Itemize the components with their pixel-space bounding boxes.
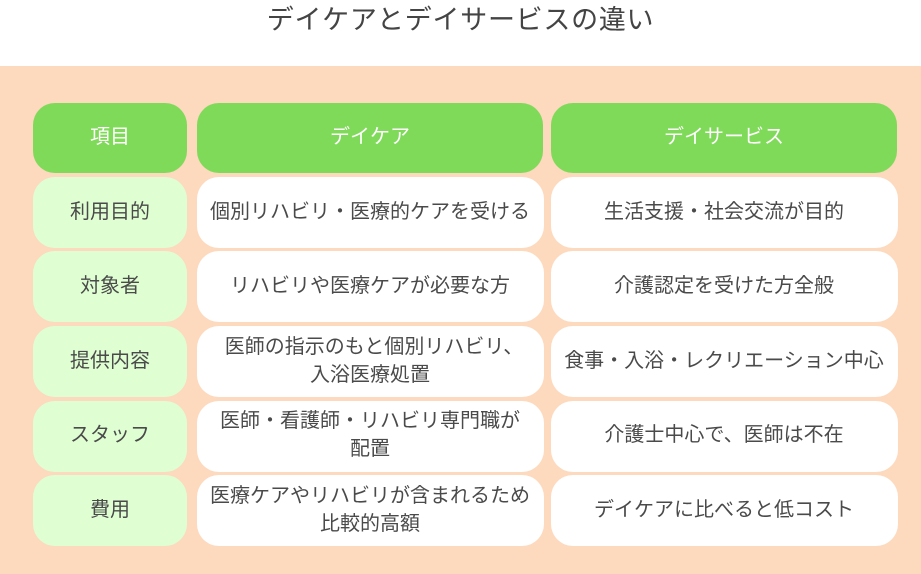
row label: 利用目的 — [33, 177, 187, 248]
cell: デイケア スタッフ — [196, 400, 544, 472]
cell: デイケア 利用目的 — [196, 177, 544, 248]
header: 項目 — [33, 102, 187, 173]
cell: デイケア スタッフ: 配置 — [350, 438, 390, 460]
cell: デイケア 提供内容 — [196, 326, 544, 397]
cell: デイケア 費用: 比較的高額 — [320, 512, 420, 534]
row label: 対象者: 対象者 — [80, 274, 140, 296]
cell: デイケア 利用目的: 個別リハビリ・医療的ケアを受ける — [210, 200, 530, 222]
row label: 提供内容: 提供内容 — [70, 350, 150, 372]
cell: デイサービス 費用 — [550, 475, 898, 546]
header: デイケア: デイケア — [330, 126, 410, 148]
cell: デイサービス スタッフ — [550, 400, 898, 472]
cell: デイサービス 対象者: 介護認定を受けた方全般 — [614, 274, 834, 296]
cell: デイサービス 費用: デイケアに比べると低コスト — [594, 498, 854, 520]
cell: デイケア 費用 — [196, 475, 544, 546]
cell: デイケア 提供内容: 入浴医療処置 — [310, 364, 430, 386]
row label: 対象者 — [33, 251, 187, 322]
row label: 費用 — [33, 475, 187, 546]
cell: デイケア 対象者: リハビリや医療ケアが必要な方 — [230, 274, 510, 296]
title: デイケアとデイサービスの違い — [267, 5, 654, 35]
cell: デイケア 対象者 — [196, 251, 544, 322]
cell: デイケア 費用: 医療ケアやリハビリが含まれるため — [210, 484, 530, 506]
cell: デイサービス 利用目的 — [550, 177, 898, 248]
cell: デイケア スタッフ: 医師・看護師・リハビリ専門職が — [220, 410, 520, 432]
header: デイサービス: デイサービス — [664, 126, 784, 148]
row label: 利用目的: 利用目的 — [70, 200, 150, 222]
row label: 費用: 費用 — [90, 498, 130, 520]
header: デイサービス — [551, 102, 897, 173]
cell: デイケア 提供内容: 医師の指示のもと個別リハビリ、 — [225, 336, 523, 358]
row label: スタッフ: スタッフ — [70, 424, 150, 446]
header: 項目: 項目 — [90, 126, 130, 148]
cell: デイサービス 対象者 — [550, 251, 898, 322]
cell: デイサービス 利用目的: 生活支援・社会交流が目的 — [604, 200, 844, 222]
row label: スタッフ — [33, 400, 187, 472]
cell: デイサービス スタッフ: 介護士中心で、医師は不在 — [604, 424, 844, 446]
header: デイケア — [197, 102, 543, 173]
cell: デイサービス 提供内容: 食事・入浴・レクリエーション中心 — [564, 350, 884, 372]
cell: デイサービス 提供内容 — [550, 326, 898, 397]
row label: 提供内容 — [33, 326, 187, 397]
